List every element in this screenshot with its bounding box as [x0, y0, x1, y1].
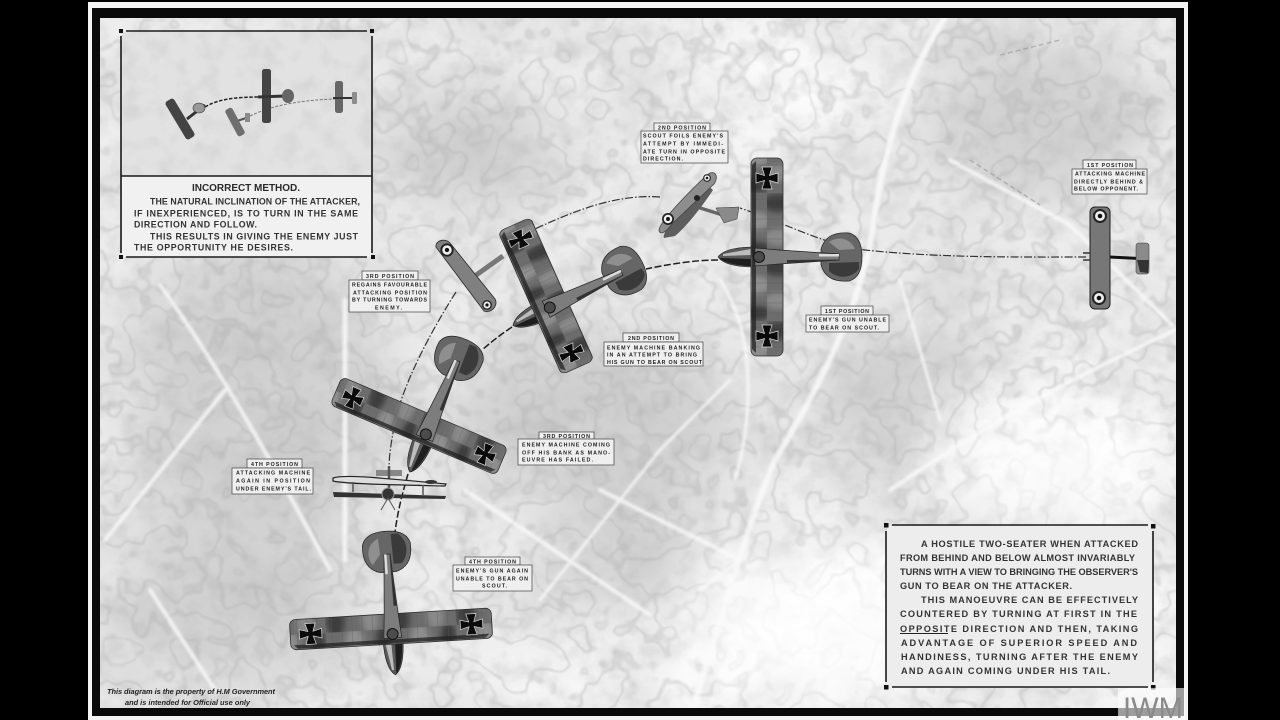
- label: attacker 1st position: DIRECTLY BEHIND &: [1074, 180, 1143, 186]
- label: attacker 1st position: 1ST POSITION: [1087, 163, 1133, 169]
- label: enemy 1st position: ENEMY'S GUN UNABLE: [809, 318, 886, 324]
- label: scout 2nd position: 2ND POSITION: [658, 126, 706, 132]
- label: attacker 4th position: 4TH POSITION: [251, 462, 298, 468]
- label: enemy 3rd position: [518, 432, 614, 465]
- label: enemy 2nd position: 2ND POSITION: [628, 336, 674, 342]
- footnote: [107, 687, 276, 707]
- incorrect method body text: DIRECTION AND FOLLOW.: [134, 220, 257, 230]
- plane: scout 3rd position: [436, 240, 503, 312]
- label: enemy 1st position: TO BEAR ON SCOUT.: [809, 326, 880, 332]
- incorrect method body text: [134, 196, 360, 252]
- panel background: [887, 526, 1153, 687]
- label: enemy 4th position: SCOUT.: [482, 584, 508, 590]
- explanation text: A HOSTILE TWO-SEATER WHEN ATTACKED: [921, 539, 1138, 549]
- label: enemy 2nd position: [604, 333, 703, 366]
- plane: enemy 1st position: [718, 158, 862, 356]
- label: enemy 2nd position: IN AN ATTEMPT TO BRING: [607, 352, 697, 358]
- inset plane: enemy at turn: [164, 98, 205, 140]
- explanation text: HANDINESS, TURNING AFTER THE ENEMY: [901, 652, 1138, 662]
- label: scout 2nd position: ATE TURN IN OPPOSITE: [643, 150, 725, 156]
- label: scout 3rd position: ENEMY.: [375, 306, 403, 312]
- inset aerial view: [122, 32, 371, 176]
- label: attacker 4th position: ATTACKING MACHINE: [236, 470, 310, 476]
- incorrect method body text: IF INEXPERIENCED, IS TO TURN IN THE SAME: [134, 208, 358, 218]
- inset plane: enemy level: [258, 69, 294, 123]
- panel: main explanation: [884, 523, 1156, 690]
- label: attacker 1st position: [1072, 160, 1147, 194]
- footnote: This diagram is the property of H.M Government: [107, 687, 276, 696]
- plane: scout 1st position: [1083, 207, 1149, 309]
- label: scout 2nd position: SCOUT FOILS ENEMY'S: [643, 134, 723, 140]
- label: attacker 4th position: UNDER ENEMY'S TAIL.: [236, 486, 312, 492]
- label: enemy 3rd position: OFF HIS BANK AS MANO-: [522, 450, 610, 456]
- label: enemy 3rd position: ENEMY MACHINE COMING: [522, 442, 610, 448]
- label: attacker 4th position: [232, 459, 313, 494]
- label: enemy 2nd position: HIS GUN TO BEAR ON SCOUT: [607, 360, 703, 366]
- explanation text: FROM BEHIND AND BELOW ALMOST INVARIABLY: [900, 553, 1135, 563]
- explanation text: OPPOSITE DIRECTION AND THEN, TAKING: [900, 624, 1138, 634]
- explanation text: GUN TO BEAR ON THE ATTACKER.: [900, 581, 1072, 591]
- incorrect method body text: THE NATURAL INCLINATION OF THE ATTACKER,: [150, 196, 360, 206]
- label: scout 3rd position: ATTACKING POSITION: [353, 290, 427, 296]
- incorrect method heading: INCORRECT METHOD.: [192, 183, 300, 194]
- label: scout 2nd position: DIRECTION.: [643, 156, 684, 162]
- label: scout 3rd position: REGAINS FAVOURABLE: [352, 282, 427, 288]
- label: enemy 2nd position: ENEMY MACHINE BANKING: [607, 346, 700, 352]
- explanation text: THIS MANOEUVRE CAN BE EFFECTIVELY: [921, 595, 1138, 605]
- label: attacker 1st position: ATTACKING MACHINE: [1075, 172, 1145, 178]
- panel: incorrect method: [119, 29, 375, 259]
- inset flight paths: [205, 97, 335, 116]
- label: enemy 4th position: UNABLE TO BEAR ON: [456, 576, 528, 582]
- flight path: enemy machine: [395, 260, 718, 532]
- plane: enemy 2nd position: [498, 217, 653, 375]
- incorrect method body text: THIS RESULTS IN GIVING THE ENEMY JUST: [150, 232, 359, 242]
- plane: enemy 3rd position: [330, 330, 508, 476]
- label: enemy 4th position: ENEMY'S GUN AGAIN: [456, 568, 528, 574]
- explanation text: TURNS WITH A VIEW TO BRINGING THE OBSERVER'S: [900, 567, 1138, 577]
- plane: scout 2nd position: [659, 173, 739, 238]
- explanation text: COUNTERED BY TURNING AT FIRST IN THE: [900, 609, 1137, 619]
- panel border: [884, 523, 1156, 690]
- explanation text: ADVANTAGE OF SUPERIOR SPEED AND: [901, 638, 1137, 648]
- label: enemy 1st position: 1ST POSITION: [825, 309, 869, 315]
- incorrect method body text: THE OPPORTUNITY HE DESIRES.: [134, 242, 293, 252]
- label: enemy 3rd position: EUVRE HAS FAILED.: [522, 458, 594, 464]
- explanation text: [900, 539, 1138, 676]
- flight path: attacking scout: [389, 197, 1086, 470]
- label: scout 3rd position: BY TURNING TOWARDS: [352, 298, 427, 304]
- label: enemy 3rd position: 3RD POSITION: [543, 434, 590, 440]
- label: enemy 4th position: [453, 557, 532, 591]
- incorrect method text background: [122, 176, 371, 257]
- label: attacker 4th position: AGAIN IN POSITION: [236, 478, 310, 484]
- plane: enemy 4th position: [289, 530, 493, 676]
- footnote: and is intended for Official use only: [125, 698, 251, 707]
- inset plane: attacker: [333, 81, 357, 113]
- plane: scout 4th position: [333, 466, 446, 510]
- inset panel border: [119, 29, 375, 259]
- label: enemy 4th position: 4TH POSITION: [469, 560, 516, 566]
- inset plane: scout turning: [224, 107, 250, 137]
- label: scout 2nd position: [641, 123, 728, 163]
- label: attacker 1st position: BELOW OPPONENT.: [1074, 186, 1139, 192]
- explanation text: AND AGAIN COMING UNDER HIS TAIL.: [901, 666, 1110, 676]
- label: scout 3rd position: [349, 271, 430, 312]
- label: scout 2nd position: ATTEMPT BY IMMEDI-: [643, 142, 723, 148]
- label: enemy 1st position: [806, 306, 889, 332]
- label: scout 3rd position: 3RD POSITION: [366, 274, 414, 280]
